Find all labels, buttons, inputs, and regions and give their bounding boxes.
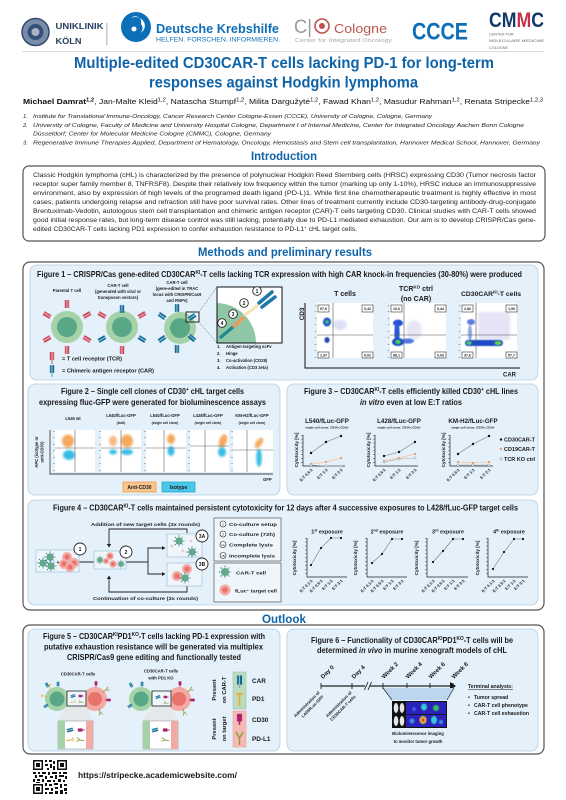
legend: receptors and ligands: on target [222, 717, 228, 741]
panel: figure 3 [287, 384, 538, 495]
cell labels: locus with CRISPR/Cas9 [153, 292, 202, 297]
logo: CIO Cologne: Cologne [334, 22, 387, 36]
authors: , Natascha Stumpf [166, 97, 237, 106]
heading: figure 5 title: putative exhaustion resistance will be generated via multiplex [44, 642, 263, 652]
authors: , Jan-Malte Kleid [94, 97, 158, 106]
logo: Uniklinik Köln [22, 18, 107, 46]
heading: figure 1 title: -T cells lacking TCR expression with high CAR knock-in frequencies (30-80%) were produced [200, 269, 522, 279]
panel: introduction text: cHL target cells. [307, 226, 357, 233]
link: project website: https://stripecke.academicwebsite.com/ [78, 770, 238, 780]
chart: 4th exposure [475, 529, 528, 593]
chart: 1st exposure: E:T 3:1 [331, 578, 344, 591]
authors: 1,2 [371, 98, 379, 104]
chart: L428: E:T 0.5:1 [371, 467, 387, 482]
logo: CMMC: CMMC [489, 9, 544, 32]
plot labels: (bulk) [117, 421, 125, 425]
affiliations: 1. [23, 114, 28, 120]
heading: figure 3 title: in vitro even at low E:T ratios [360, 397, 462, 407]
cell labels: CAR-T cell [166, 280, 188, 285]
timeline: Week 4 [405, 661, 424, 680]
diagram: CD30CAR-T cells with PD1 [41, 672, 111, 749]
legend: receptors and ligands: PD1 [252, 696, 265, 703]
chart: L428: Cytotoxicity [%] [366, 432, 371, 467]
chart: 2nd exposure [353, 529, 407, 593]
logo: CIO Cologne: Center for Integrated Oncology [295, 38, 392, 44]
panel: introduction text: Classic Hodgkin lymphoma (cHL) is characterized by the presence of polynuclear Hodgkin Reed Sternberg cells (HRSC) expressing CD30 (Tumor necrosis factor [33, 172, 536, 179]
chart: 4th exposure: Cytotoxicity [%] [475, 540, 480, 575]
heading: figure 5 title: PD1 [118, 631, 132, 641]
chart: KM-H2: Cytotoxicity [%] [441, 432, 446, 467]
timeline: Administration of [325, 690, 353, 718]
panel: introduction text: cases, patients undergoing relapse and refraction still have poor survival rates. Other lines of treatment currently include CD30-targeting antibody-drug-conjugate [33, 199, 537, 206]
authors: 1,2 [86, 98, 94, 104]
legend: receptors: = Chimeric antigen receptor (CAR) [62, 368, 154, 374]
cell labels [53, 280, 202, 303]
authors: 1,2 [158, 98, 166, 104]
step 1 box: + [57, 560, 60, 566]
legend: chart series [500, 438, 536, 463]
chart: 1st exposure: exposure [317, 530, 343, 536]
legend: cell types [214, 563, 281, 602]
legend: steps: Incomplete lysis [229, 554, 276, 558]
chart: L428: single cell clone, CD30+,CD19- [377, 426, 421, 430]
logo: CCCE: CCCE [412, 18, 468, 46]
panel: introduction text: Brentuximab-Vedotin, autologous stem cell transplantation and chimeric antigen receptor (CAR)-T cells targeting CD30. Clinical studies with CAR-T cells showed [33, 208, 536, 215]
chart: 3rd exposure: E:T 0.5:1 [430, 578, 446, 593]
affiliations: Institute for Translational Immune-Oncology, Cancer Research Center Cologne-Essen (CCCE), University of Cologne, Cologne, Germany [33, 114, 433, 120]
timeline [293, 661, 470, 722]
panel: introduction text: receptor super family member 8, TNFRSF8). Despite their relatively low frequency within the tumor (marking up only 1-10%), HRSC induce an immunosuppressive [33, 181, 537, 188]
list: CAR parts: Antigen-targeting scFv [226, 344, 272, 349]
logo: Uniklinik Köln: KÖLN [56, 36, 82, 46]
chart: KM-H2 [441, 418, 498, 482]
heading: figure 4 title: -T cells maintained persistent cytotoxicity for 12 days after 4 successive exposures to L428/fLuc-GFP target cells [128, 502, 518, 512]
flow plot: L540 bulk [100, 430, 141, 472]
logo: Deutsche Krebshilfe [121, 12, 280, 44]
terminal analysis list: • [468, 711, 470, 717]
flow plot: KM-H2 clone [232, 430, 273, 472]
step 3A box [167, 530, 208, 558]
chart: 4th exposure: E:T 0.1:1 [480, 578, 496, 593]
diagram: CAR structure inset: 3 [232, 312, 235, 318]
heading: figure 2 title: cHL target cells [189, 386, 244, 396]
legend: steps: 1 [222, 522, 224, 526]
heading: figure 6 title: -T cells will be [464, 635, 513, 645]
legend: receptors and ligands: on CAR-T [222, 676, 228, 703]
timeline: Week 8 [451, 661, 470, 680]
chart: 4th exposure: th [496, 529, 499, 533]
legend: cell types: target cell [249, 588, 277, 594]
cell labels: (generated with viral or [95, 289, 141, 294]
chart: 1st exposure [292, 529, 347, 593]
cell labels: transposon vectors) [98, 295, 139, 300]
legend: receptors and ligands: Present [212, 718, 218, 740]
chart: 1st exposure: E:T 0.1:1 [298, 578, 314, 593]
chart: 2nd exposure: 2 [371, 530, 374, 536]
chart: L540: Cytotoxicity [%] [294, 432, 299, 467]
cell labels: CAR-T cell [107, 283, 129, 288]
step 3A box: 3A [199, 534, 206, 540]
chart: 2nd exposure: nd [374, 529, 378, 533]
heading: figure 5 title: KO [132, 632, 139, 638]
heading: figure 3 title [304, 386, 518, 407]
heading: figure 5 title: Figure 5 – CD30CAR [43, 631, 124, 641]
legend: receptors and ligands: CD30 [252, 717, 269, 724]
list: CAR parts: 4. [217, 365, 220, 370]
flow plot: T cells [316, 303, 373, 358]
chart: 2nd exposure: E:T 1:1 [382, 578, 395, 591]
heading: figure 2 title: expressing fluc-GFP were generated for bioluminescence assays [39, 397, 266, 407]
chart: 3rd exposure: Cytotoxicity [%] [414, 540, 419, 575]
logo: CMMC: MOLECULARE MEDICINE [489, 39, 545, 43]
panel: figure 1 [30, 265, 538, 380]
icon: parental T cell [42, 300, 92, 354]
heading: figure 6 title: PD1 [442, 635, 457, 645]
chart: 4th exposure: E:T 1:1 [504, 578, 517, 591]
flow plot: CD30CAR-KI T cells: 37,6 [464, 354, 471, 358]
chart: L540: E:T 2:1 [331, 467, 344, 480]
diagram: CAR structure inset: 4 [221, 321, 224, 327]
icon: QR code [32, 760, 67, 794]
chart: 3rd exposure: rd [435, 529, 439, 533]
chart: 4th exposure: E:T 0.5:1 [491, 578, 507, 593]
plot labels: L540/fLuc-GFP [150, 413, 180, 418]
title: Multiple-edited CD30CAR-T cells lacking PD-1 for long-term [74, 55, 494, 72]
title [74, 55, 494, 92]
flow plot headers: T cells [334, 291, 356, 298]
icon: CAR-T cell gene-edited [157, 287, 217, 353]
chart: KM-H2: E:T 0.5:1 [445, 467, 461, 482]
legend: chart series: TCR KO ctrl [504, 457, 536, 463]
flow plot: T cells: 1,97 [320, 354, 327, 358]
flow plot axes [299, 303, 520, 378]
authors: , Milita Dargužytė [244, 97, 310, 106]
affiliations: Düsseldorf; Center for Molecular Medicine Cologne (CMMC), Cologne, Germany [33, 132, 272, 138]
legend: steps: 3A [221, 543, 225, 547]
chart: 3rd exposure: E:T 3:1 [453, 578, 466, 591]
heading: figure 5 title: CRISPR/Cas9 gene editing and functionally tested [67, 652, 241, 662]
logo: CIO Cologne [294, 17, 392, 44]
affiliations: Regenerative Immune Therapies Applied, Department of Hematology, Oncology, Hemostasis and Stem cell transplantation, Hannover Medical School, Hannover, Germany [33, 140, 541, 146]
panel: figure 2 [28, 384, 280, 495]
title: responses against Hodgkin lymphoma [149, 74, 418, 92]
chart: L540: E:T 1:1 [316, 467, 329, 480]
timeline: L428/fLuc-GFP [300, 694, 325, 719]
authors: , Masudur Rahman [379, 97, 452, 106]
list: CAR parts [217, 344, 272, 370]
flow plot: CD30CAR-KI T cells: 2,80 [464, 307, 471, 311]
heading: figure 6 title [311, 635, 513, 655]
panel: introduction text: + [304, 225, 307, 230]
chart: L428: L428/fLuc-GFP [377, 418, 421, 425]
flow plot headers: KO [413, 284, 421, 290]
chart: 2nd exposure: E:T 0.1:1 [359, 578, 375, 593]
timeline: CD30CAR-T cells [329, 694, 357, 722]
logo: CMMC: CENTER FOR [489, 32, 514, 36]
chart: L540: L540/fLuc-GFP [305, 418, 349, 425]
chart: 1st exposure: st [314, 529, 318, 533]
heading: figure 6 title: Figure 6 – Functionality of CD30CAR [311, 635, 456, 645]
axes: APC (isotype or [34, 436, 39, 468]
flow plot: CD30CAR-KI T cells: 1,90 [508, 307, 515, 311]
legend: steps: 3B [221, 554, 225, 558]
heading: figure 5 title [43, 631, 265, 662]
diagram: CD30CAR-T cells with PD1 KO: CD30CAR-T cells [144, 668, 179, 674]
list: CAR parts: 1. [217, 344, 220, 349]
flow plot headers: -T cells [498, 291, 521, 298]
heading: figure 6 title: KI [438, 636, 443, 642]
panel: figure 4 [28, 500, 538, 605]
legend: steps: Complete lysis [229, 542, 274, 548]
heading: figure 3 title: Figure 3 – CD30CAR [304, 386, 385, 396]
list: CAR parts: 3. [217, 358, 220, 363]
chart: 2nd exposure: E:T 0.5:1 [369, 578, 385, 593]
authors: 1,2,3 [530, 98, 543, 104]
heading: figure 3 title: KI [374, 387, 380, 393]
chart: 3rd exposure: exposure [439, 530, 464, 536]
legend: chart series: CD30CAR-T [504, 438, 536, 444]
timeline: Administration of [293, 690, 321, 718]
affiliations [22, 114, 541, 146]
logo: CMMC: COLOGNE [489, 46, 508, 50]
flow plot headers: ctrl [420, 286, 433, 293]
flow plot: T cells: 0,42 [364, 307, 371, 311]
flow plot headers: KI [493, 290, 498, 294]
chart: 2nd exposure: E:T 3:1 [392, 578, 405, 591]
flow plot: CD30CAR-KI T cells: 57,7 [508, 354, 515, 358]
diagram: co-culture workflow: Continuation of co-culture (3x rounds) [93, 596, 199, 601]
authors: , Renata Stripecke [460, 97, 530, 106]
chart: 4th exposure: 4 [493, 530, 496, 536]
chart: 1st exposure: E:T 0.5:1 [308, 578, 324, 593]
chart: 3rd exposure: E:T 1:1 [443, 578, 456, 591]
heading: figure 2 title [39, 386, 266, 407]
chart: 1st exposure: E:T 1:1 [321, 578, 334, 591]
legend: receptors and ligands: CAR [252, 678, 266, 685]
panel: introduction text [23, 166, 545, 241]
timeline: Day 4 [351, 664, 367, 680]
panel: outlook outer frame [23, 625, 544, 754]
flow plot axes: CD3 [299, 307, 306, 320]
step 3B box: 3B [199, 562, 206, 568]
flow plot: TCR KO ctrl [388, 303, 446, 358]
chart: L428: E:T 2:1 [405, 467, 418, 480]
authors: Michael Damrat [23, 97, 87, 106]
panel: methods outer frame [23, 262, 544, 610]
panel: figure 6 [287, 629, 538, 751]
logo: CMMC [489, 9, 545, 50]
chart: 2nd exposure: exposure [378, 530, 403, 536]
bioluminescence imaging: to monitor tumor growth [394, 739, 443, 744]
chart: 3rd exposure: E:T 0.1:1 [420, 578, 436, 593]
axes: GFP [263, 477, 272, 482]
heading: figure 5 title: KI [113, 632, 118, 638]
chart: 2nd exposure: Cytotoxicity [%] [353, 540, 358, 575]
terminal analysis list: CAR-T cell exhaustion [474, 711, 529, 717]
cell labels: Parental T cell [53, 288, 81, 293]
heading: figure 5 title: -T cells lacking PD-1 expression with [139, 631, 265, 641]
list: CAR parts: Activation (CD3 zeta) [226, 365, 268, 370]
chart: KM-H2: single cell clone, CD30+,CD19- [451, 426, 495, 430]
timeline: Day 0 [320, 664, 336, 680]
legend: chart series: CD19CAR-T [504, 447, 536, 453]
chart: KM-H2: E:T 2:1 [479, 467, 492, 480]
chart: KM-H2: E:T 1:1 [463, 467, 476, 480]
chart: L540: single cell clone, CD30+,CD19- [305, 426, 349, 430]
heading: figure 2 title: Figure 2 – Single cell clones of CD30 [61, 386, 206, 396]
flow plot: CD30CAR-KI T cells [460, 303, 517, 358]
bioluminescence imaging: Bioluminescence imaging [392, 731, 444, 736]
logo: Uniklinik Köln: UNIKLINIK [56, 21, 104, 31]
terminal analysis list: • [468, 703, 470, 709]
chart: 3rd exposure: 3 [432, 530, 435, 536]
chart: 1st exposure: 1 [311, 530, 314, 536]
logo: Deutsche Krebshilfe: Deutsche Krebshilfe [156, 21, 279, 36]
chart: 3rd exposure [414, 529, 468, 593]
axes: anti-CD30) [40, 441, 44, 462]
diagram: CAR structure inset: 1 [256, 289, 259, 295]
heading: figure 3 title: + [481, 387, 484, 393]
step 1 box: 1 [79, 547, 82, 553]
list: CAR parts: 2. [217, 351, 220, 356]
flow plot: TCR KO ctrl: 0,44 [437, 307, 444, 311]
terminal analysis list: • [468, 695, 470, 701]
flow plot: T cells: 0,02 [364, 354, 371, 358]
legend: anti-CD30 and isotype [123, 482, 195, 492]
heading: figure 4 title: Figure 4 – CD30CAR [53, 502, 134, 512]
authors: 1,2 [310, 98, 319, 104]
heading: figure 6 title: determined in vivo in murine xenograft models of cHL [317, 645, 507, 655]
plot labels: (single cell clone) [195, 421, 221, 425]
plot labels [65, 413, 269, 425]
panel: introduction text: environment, also by expression of high levels of the programed death ligand (PD-L)1. While first line chemotherapeutic treatment is highly effective in most [33, 190, 536, 197]
legend: steps [214, 518, 281, 561]
timeline: Week 2 [381, 661, 400, 680]
flow plot headers: CD30CAR [461, 291, 493, 298]
flow plot: TCR KO ctrl: 0,93 [437, 354, 444, 358]
terminal analysis list: Terminal analysis: [468, 684, 513, 690]
chart: 4th exposure: E:T 3:1 [513, 578, 526, 591]
step 2 box [94, 546, 132, 569]
authors: 1,2 [452, 98, 460, 104]
bioluminescence imaging [383, 688, 454, 744]
list: CAR parts: Co-activation (CD28) [226, 358, 268, 363]
legend: cell types: CAR-T cell [236, 570, 266, 576]
logo: Deutsche Krebshilfe: HELFEN. FORSCHEN. INFORMIEREN. [156, 36, 280, 44]
list: CAR parts: Hinge [226, 351, 238, 356]
legend: steps: 2 [222, 532, 224, 536]
chart: L428 [366, 418, 421, 482]
heading: Outlook: Outlook [262, 614, 307, 626]
flow plot: TCR KO ctrl: 88,1 [393, 354, 400, 358]
heading: figure 3 title: cHL lines [484, 386, 518, 396]
diagram: co-culture workflow: Addition of new target cells (3x rounds) [91, 522, 201, 527]
flow plot: T cells: 97,6 [320, 307, 327, 311]
heading: figure 4 title: KI [124, 504, 129, 510]
diagram: CAR structure inset [217, 287, 282, 343]
step 1 box [36, 543, 86, 572]
flow plot headers: (no CAR) [401, 296, 431, 303]
panel: figure 5 [28, 629, 280, 751]
panel: introduction text: good initial response rates, but long-term disease control was still lacking, potentially due to PD-L1 mediated exhaustion. Our aim is to develop CRISPR/Cas gene- [33, 217, 536, 224]
diagram: CD30CAR-T cells with PD1 KO [127, 668, 195, 749]
affiliations: University of Cologne, Faculty of Medicine and University Hospital Cologne, Department I of Internal Medicine, Center for Integrated Oncology Aachen Bonn Cologne [33, 123, 524, 129]
legend: receptors: = T cell receptor (TCR) [62, 356, 122, 362]
legend: anti-CD30 and isotype: Anti-CD30 [127, 485, 152, 491]
legend: cell types: fLuc [235, 588, 244, 594]
legend: receptors [50, 352, 154, 377]
terminal analysis list: CAR-T cell phenotype [474, 703, 528, 709]
flow plot: TCR KO ctrl: 10,6 [393, 307, 400, 311]
plot labels: L540/fLuc-GFP [106, 413, 136, 418]
plot labels: L428/fLuc-GFP [193, 413, 223, 418]
axes [34, 430, 273, 482]
chart: L540: E:T 0.5:1 [298, 467, 314, 482]
diagram: CD30CAR-T cells with PD1 KO: with PD1 KO [147, 676, 174, 680]
legend: receptors and ligands [212, 672, 271, 747]
cell labels: and RNPs) [166, 298, 188, 303]
plot labels: (single cell clone) [152, 421, 178, 425]
affiliations: 3. [23, 140, 28, 146]
authors: 1,2 [236, 98, 244, 104]
flow plot headers: TCR [399, 286, 413, 293]
legend: receptors and ligands: PD-L1 [252, 736, 271, 743]
authors: , Fawad Khan [318, 97, 371, 106]
heading: figure 2 title: + [186, 387, 189, 393]
heading: Introduction: Introduction [251, 151, 317, 163]
flow plot: L428 clone [189, 430, 229, 472]
flow plot headers [334, 284, 521, 303]
heading: figure 1 title: Figure 1 – CRISPR/Cas gene-edited CD30CAR [37, 269, 218, 279]
flow plot axes: CAR [503, 372, 517, 378]
affiliations: 2. [22, 123, 28, 129]
plot labels: L540 wt [65, 416, 81, 421]
cell labels: (gene-edited in TRAC [156, 286, 198, 291]
chart: L428: E:T 1:1 [389, 467, 402, 480]
chart: KM-H2: KM-H2/fLuc-GFP [448, 418, 498, 425]
legend: anti-CD30 and isotype: Isotype [170, 485, 187, 491]
chart: L540 [294, 418, 349, 482]
diagram: CAR structure inset: 2 [243, 301, 246, 307]
legend: cell types: + [247, 588, 249, 592]
step 2 box: 2 [125, 550, 128, 556]
heading: figure 1 title: KI [195, 270, 201, 276]
flow plot: L540 wt [54, 430, 95, 472]
terminal analysis list: Tumor spread [474, 695, 508, 701]
plot labels: (single cell clone) [239, 421, 265, 425]
chart: 4th exposure: exposure [499, 530, 525, 536]
heading: figure 3 title: -T cells efficiently killed CD30 [379, 386, 481, 396]
step 3B box [167, 558, 208, 586]
legend: steps: Co-culture (72h) [229, 532, 276, 537]
legend: receptors and ligands: Present [212, 679, 218, 701]
flow plot: L540 clone [145, 430, 186, 472]
legend: steps: Co-culture setup [229, 522, 278, 527]
heading: figure 6 title: KO [457, 636, 464, 642]
timeline: Week 6 [428, 661, 447, 680]
heading: Methods and preliminary results: Methods and preliminary results [198, 247, 372, 259]
logo: CIO Cologne: C| [294, 17, 312, 38]
diagram: co-culture workflow [36, 522, 208, 601]
chart: 1st exposure: Cytotoxicity [%] [292, 540, 297, 575]
icon: CAR-T cell viral [97, 305, 147, 354]
terminal analysis list [468, 684, 529, 717]
plot labels: KM-H2/fLuc-GFP [235, 413, 269, 418]
panel: introduction text: edited CD30CAR-T cells lacking PD1 expression to confer exhaustion resistance to PD-L1 [33, 226, 276, 233]
diagram: CD30CAR-T cells with PD1: CD30CAR-T cells [61, 672, 96, 676]
